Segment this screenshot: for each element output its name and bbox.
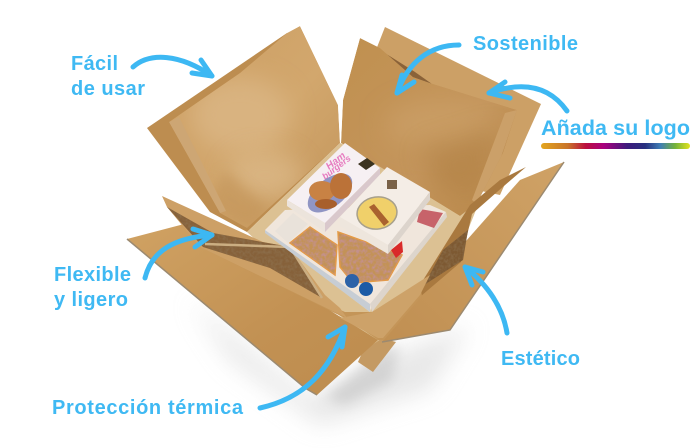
inner folded flap: [162, 196, 347, 318]
label: Añada su logo: Añada su logo: [541, 116, 690, 140]
sausage box: [340, 167, 430, 254]
paper pocket: right side: [420, 167, 526, 296]
corrugated edge: [127, 239, 317, 395]
logo: [358, 158, 375, 170]
blue badges: [345, 274, 359, 288]
label: Fácil de usar: Fácil: [71, 53, 118, 75]
corrugated paper: [167, 207, 322, 298]
arrow: Sostenible: [397, 45, 459, 93]
front paper wrap: [200, 247, 430, 340]
pink title line 2: burgers: [320, 153, 353, 182]
arrow: Fácil de usar: [133, 57, 212, 76]
front left flap: [127, 223, 378, 395]
paper pad: left: [169, 26, 340, 228]
crumpled fill behind right pad: [372, 45, 432, 90]
label: Flexible y ligero: y ligero: [54, 289, 128, 311]
front right flap: [382, 162, 564, 342]
box floor: [247, 143, 478, 345]
pizza box: [265, 205, 447, 312]
arrow: Flexible y ligero: [145, 229, 212, 278]
label: Sostenible: Sostenible: [473, 33, 578, 55]
colour bar: [541, 143, 690, 149]
arrow: Protección térmica: [260, 327, 345, 408]
burger one: [309, 181, 335, 201]
label: Protección térmica: Protección térmica: [52, 397, 244, 419]
label: Fácil de usar: [71, 53, 145, 100]
dish: [355, 194, 399, 232]
red logo: [391, 241, 403, 258]
cardboard box: [147, 27, 541, 372]
arrow: Añada su logo: [489, 82, 567, 111]
label: Flexible y ligero: [54, 264, 131, 311]
label: Estético: Estético: [501, 348, 580, 370]
label: Fácil de usar: de usar: [71, 78, 145, 100]
left flap: [147, 33, 340, 232]
corrugated edge: [382, 162, 564, 342]
corrugated filling: [424, 230, 468, 285]
torn edge: [205, 244, 322, 298]
burger three: [315, 199, 337, 209]
hamburger box: [287, 143, 380, 232]
ground shadow: [190, 300, 470, 425]
box bottom corner: [358, 335, 396, 372]
plate: [301, 166, 359, 220]
nutrition label: [275, 213, 308, 243]
pizza slices: [290, 227, 402, 283]
pink title: Ham: [324, 150, 348, 172]
dessert image: [417, 209, 443, 228]
paper pad: right: [341, 38, 517, 216]
label: Flexible y ligero: Flexible: [54, 264, 131, 286]
back flap: [372, 27, 541, 195]
small logo: [387, 180, 397, 189]
burger two: [330, 173, 352, 199]
arrow: Estético: [465, 267, 507, 333]
